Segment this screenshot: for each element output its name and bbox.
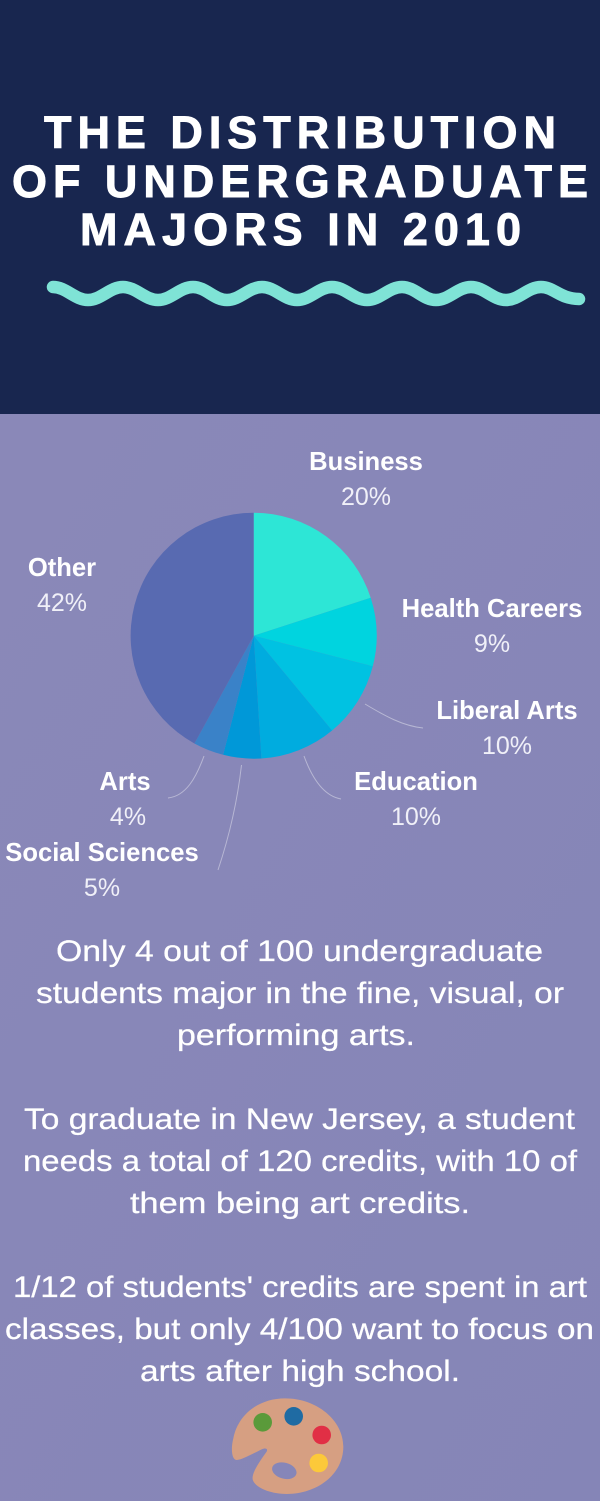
- label: Business: Business: [309, 448, 423, 476]
- label: Health Careers: 9%: [474, 630, 510, 658]
- label: Social Sciences: 5%: [84, 874, 120, 902]
- label: Education: 10%: [391, 803, 441, 831]
- text block: credits: To graduate in New Jersey, a student: [24, 1103, 576, 1136]
- main panel: [0, 414, 600, 1501]
- label: Other: [28, 554, 96, 617]
- text block: comparison: 1/12 of students' credits are spent in art: [13, 1271, 588, 1304]
- label: Arts: [99, 768, 151, 831]
- label: Education: [354, 768, 478, 831]
- label: Health Careers: [402, 595, 582, 658]
- slice: Social Sciences 5%: [223, 636, 261, 759]
- label: Health Careers: Health Careers: [402, 595, 582, 623]
- text block: arts majors: students major in the fine, visual, or: [36, 977, 564, 1010]
- label: Social Sciences: [5, 839, 199, 902]
- text block: credits: [23, 1103, 578, 1220]
- wavy underline: [53, 287, 579, 300]
- label: Other: 42%: [37, 589, 87, 617]
- icon: paint palette: [232, 1398, 343, 1494]
- text block: arts majors: Only 4 out of 100 undergraduate: [56, 935, 543, 968]
- label: Other: Other: [28, 554, 96, 582]
- header panel: [0, 0, 600, 414]
- label: Education: Education: [354, 768, 478, 796]
- text block: arts majors: performing arts.: [177, 1019, 415, 1052]
- slice: Health Careers 9%: [254, 598, 377, 666]
- slice: Education 10%: [254, 636, 332, 758]
- slice: Liberal Arts 10%: [254, 636, 373, 730]
- text block: credits: them being art credits.: [130, 1187, 470, 1220]
- label: Arts: Arts: [99, 768, 151, 796]
- text block: credits: needs a total of 120 credits, with 10 of: [23, 1145, 578, 1178]
- title: MAJORS IN 2010: [80, 204, 521, 255]
- text block: comparison: classes, but only 4/100 want to focus on: [5, 1313, 594, 1346]
- label: Business: [309, 448, 423, 511]
- title: [12, 107, 588, 255]
- text block: comparison: [5, 1271, 594, 1388]
- label: Liberal Arts: 10%: [482, 732, 532, 760]
- title: THE DISTRIBUTION: [44, 107, 556, 158]
- pie chart: [131, 513, 377, 759]
- label: Liberal Arts: [436, 697, 578, 760]
- slice: Arts 4%: [194, 636, 254, 755]
- title: OF UNDERGRADUATE: [12, 156, 588, 207]
- label: Liberal Arts: Liberal Arts: [436, 697, 578, 725]
- label: Business: 20%: [341, 483, 391, 511]
- slice: Business 20%: [254, 513, 371, 636]
- label: Arts: 4%: [110, 803, 146, 831]
- label: Social Sciences: Social Sciences: [5, 839, 199, 867]
- text block: arts majors: [36, 935, 564, 1052]
- leader lines: [168, 704, 423, 870]
- slice: Other 42%: [131, 513, 254, 744]
- text block: comparison: arts after high school.: [140, 1355, 460, 1388]
